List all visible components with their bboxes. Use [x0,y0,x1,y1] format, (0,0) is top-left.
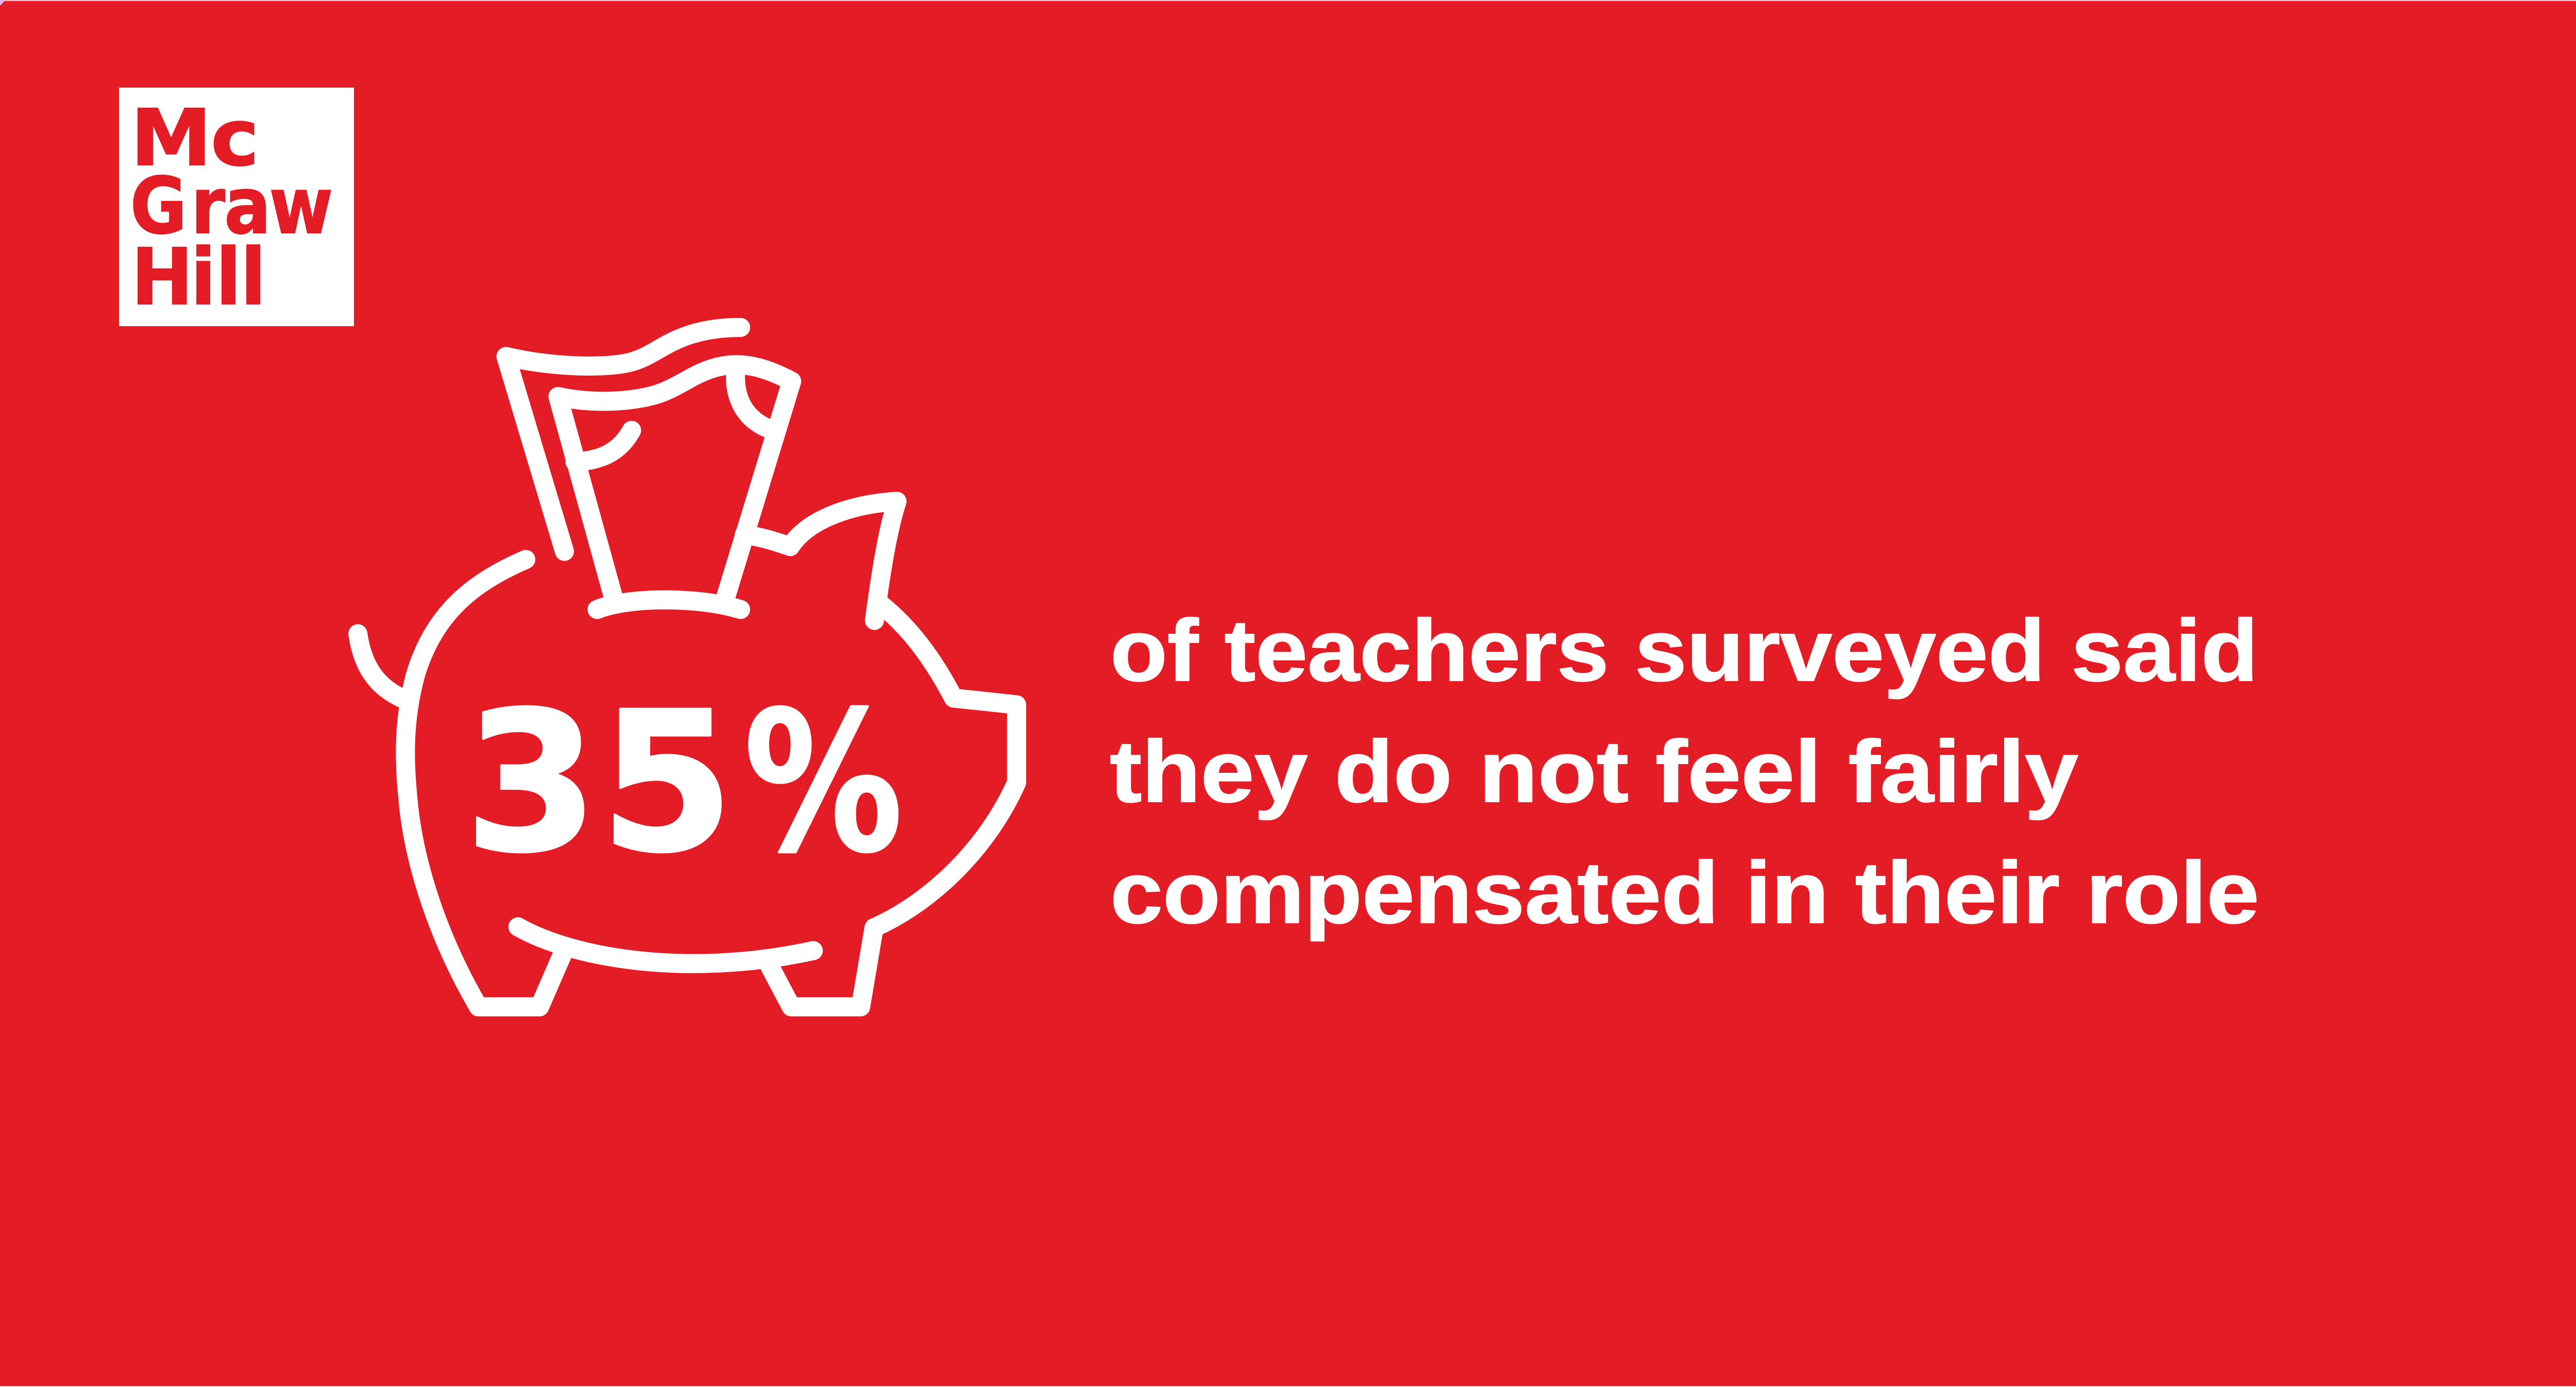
pig back and rear leg [405,560,563,1007]
logo: McGraw Hill: Mc [130,93,259,183]
stat: 35%: % [744,670,903,895]
pig front leg and snout [770,604,1016,1007]
text block: description [1110,602,2259,942]
logo: McGraw Hill: Hill [131,232,266,323]
pig ear [744,501,897,620]
pig belly [518,927,814,963]
icon: piggy bank with banknotes [358,327,1016,1007]
front banknote [558,365,792,597]
back banknote [506,327,741,551]
text block: description: compensated in their role [1110,844,2259,942]
stat: 35%: 35 [464,671,734,895]
text block: description: of teachers surveyed said [1110,602,2258,700]
logo: McGraw Hill [119,88,354,326]
coin slot [597,600,741,610]
logo: McGraw Hill: Graw [130,160,333,251]
pig tail [358,634,404,699]
text block: description: they do not feel fairly [1110,723,2078,821]
stat: 35% [464,670,903,895]
banknote corner right [736,368,772,430]
banknote corner left [575,430,632,462]
